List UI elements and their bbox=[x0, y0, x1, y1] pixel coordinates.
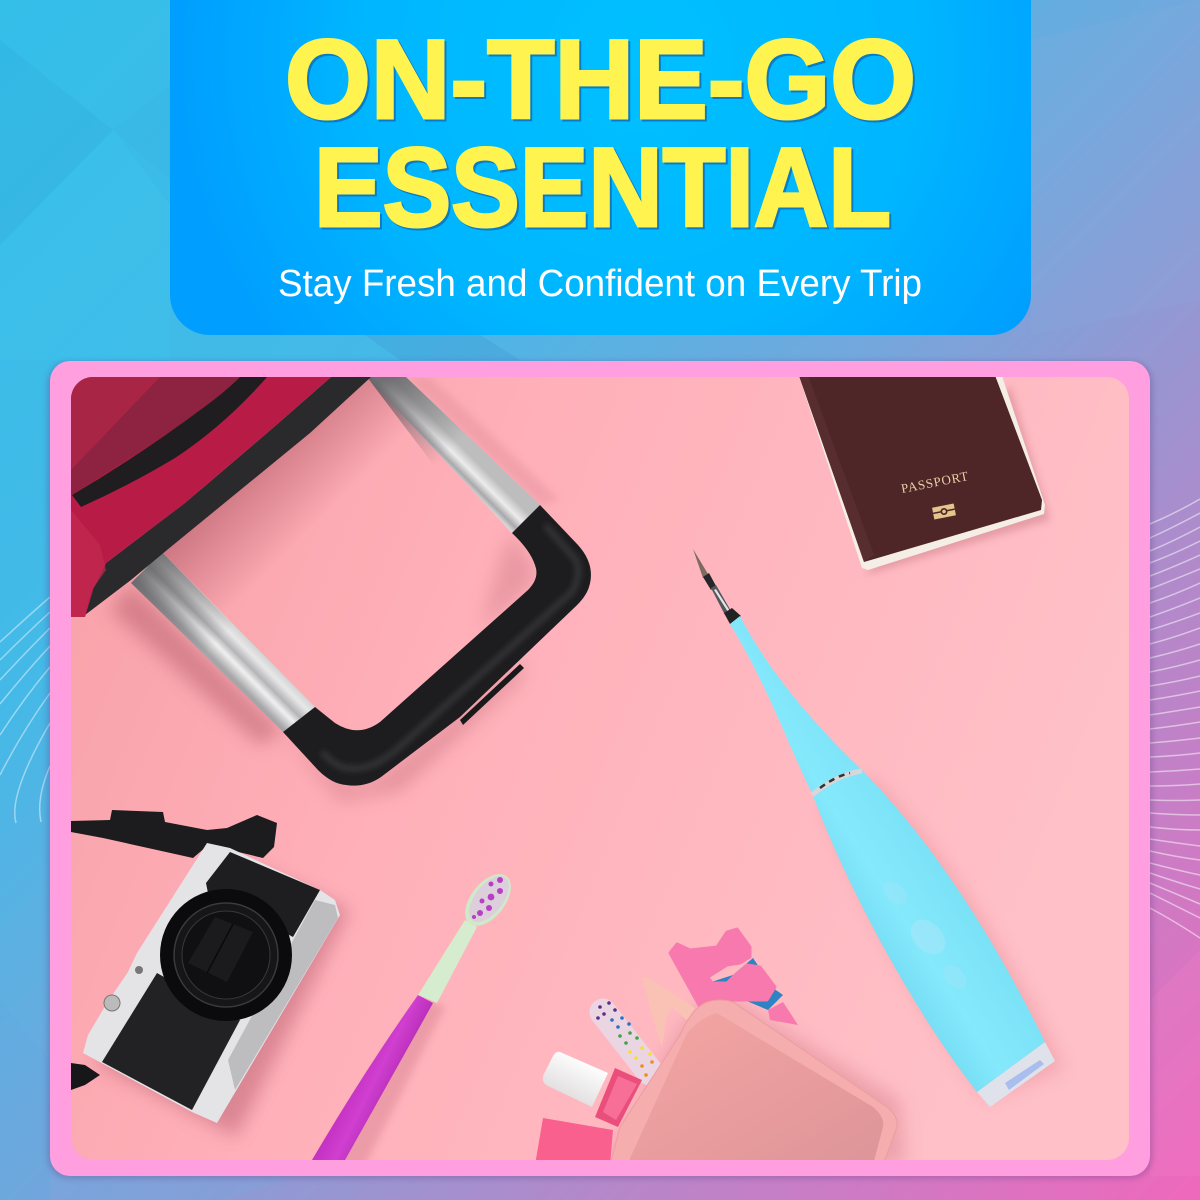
pink photo frame bbox=[47, 361, 1153, 1179]
metal tip bbox=[693, 549, 708, 578]
pouch bbox=[610, 1000, 897, 1165]
lens bbox=[160, 889, 292, 1021]
silver body bbox=[83, 843, 340, 1123]
black rubber grip bbox=[283, 505, 591, 786]
passport bbox=[797, 370, 1050, 575]
nail polish bottle bbox=[543, 1052, 642, 1127]
metal ring bbox=[812, 771, 862, 795]
sponge bbox=[536, 1118, 613, 1160]
luggage handle and bag bbox=[71, 377, 591, 800]
nail file bbox=[596, 1001, 654, 1077]
camera bbox=[71, 810, 349, 1137]
passport chip emblem bbox=[932, 504, 956, 519]
subtitle: Stay Fresh and Confident on Every Trip bbox=[278, 263, 922, 305]
toothbrush bbox=[312, 866, 520, 1169]
title: ESSENTIAL bbox=[314, 125, 891, 250]
leather grips bbox=[206, 852, 320, 937]
bag black base bbox=[71, 377, 371, 617]
power button bbox=[910, 920, 946, 954]
clear base bbox=[977, 1042, 1055, 1107]
cosmetics pouch with accessories bbox=[535, 929, 905, 1165]
brush head bbox=[465, 874, 511, 926]
purple handle bbox=[312, 995, 433, 1160]
neck bbox=[418, 920, 477, 1003]
side tab bbox=[460, 664, 524, 725]
blue body bbox=[730, 616, 1045, 1092]
passport label: PASSPORT bbox=[900, 468, 970, 496]
clip bbox=[642, 977, 695, 1047]
photo area bbox=[71, 370, 1129, 1169]
title: ON-THE-GO bbox=[285, 17, 916, 142]
toe separator bbox=[670, 929, 798, 1025]
dental scaler device bbox=[693, 549, 1065, 1107]
title bbox=[285, 17, 916, 250]
handle cast shadows bbox=[110, 377, 560, 800]
camera strap bbox=[71, 810, 277, 858]
trolley tubes bbox=[367, 377, 540, 533]
header panel bbox=[170, 0, 1031, 335]
red fabric bbox=[71, 377, 331, 617]
